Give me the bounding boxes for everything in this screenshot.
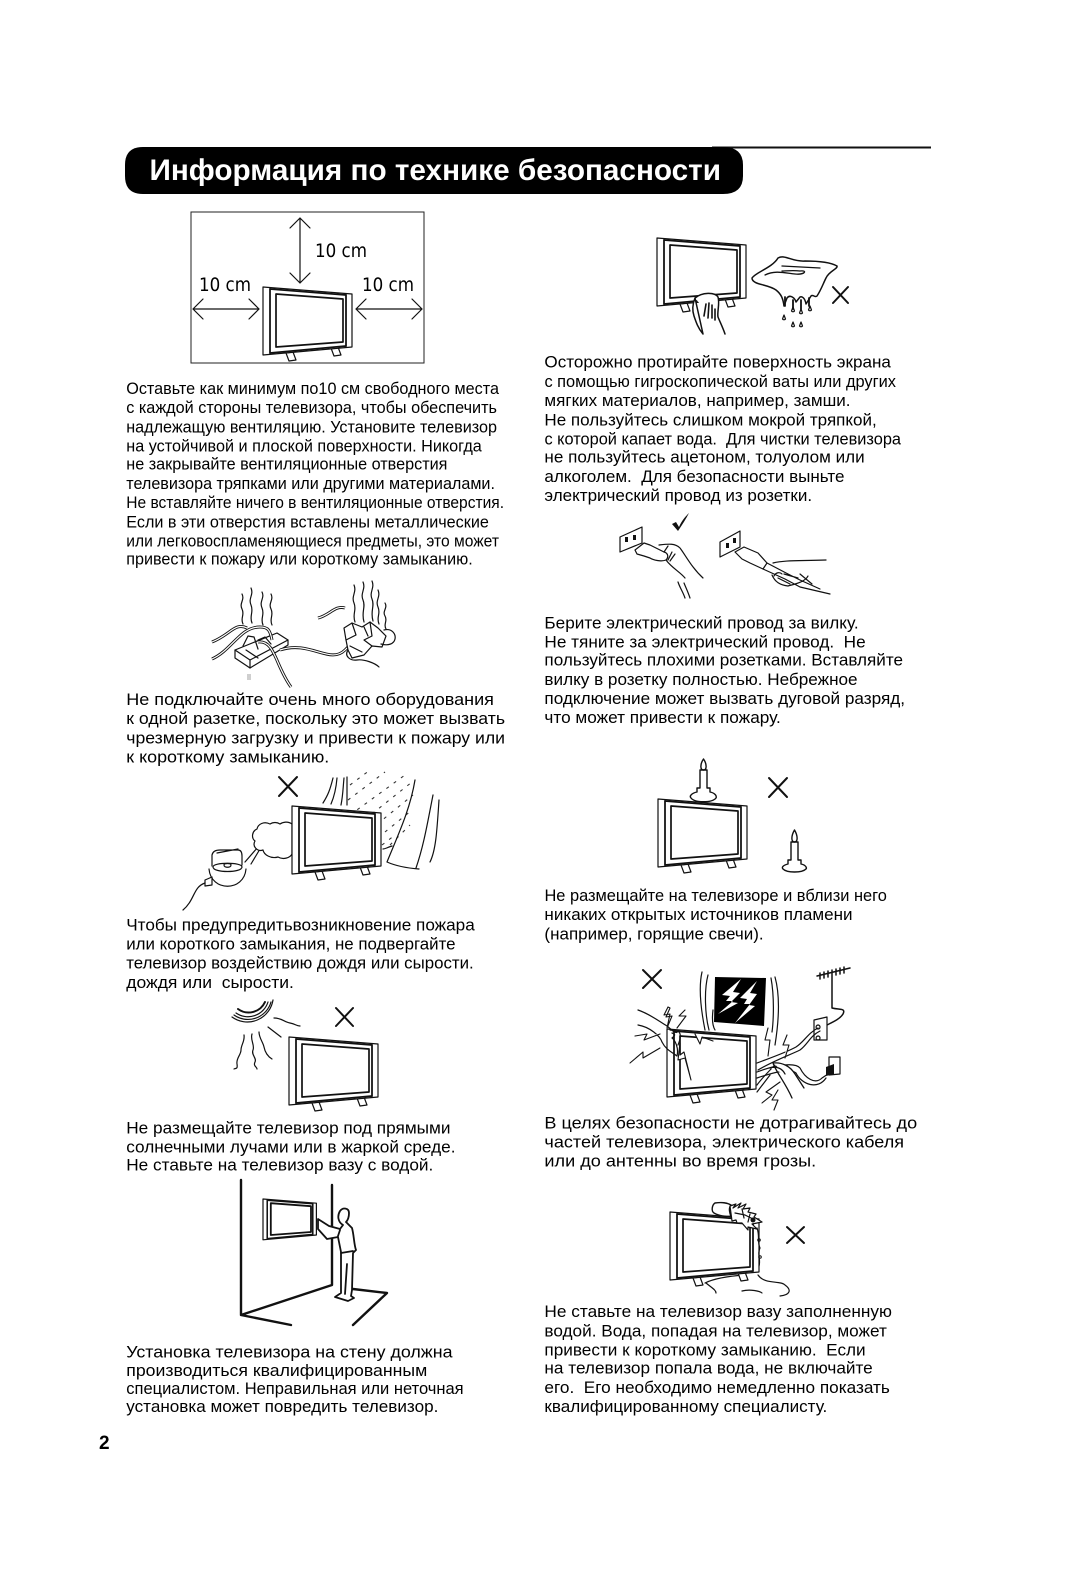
text: ventilation: Оставьте как минимум по10 см свободного места — [126, 379, 500, 398]
text: rain and moisture: дождя или сырости. — [126, 973, 294, 992]
icon: X mark sun — [336, 1008, 353, 1026]
text: ventilation: или легковоспламеняющиеся предметы, это может — [126, 531, 499, 550]
illustration: TV during a thunderstorm — [630, 967, 850, 1110]
title banner — [125, 147, 931, 194]
text: open flames: (например, горящие свечи). — [544, 924, 764, 943]
text: cleaning the screen — [544, 353, 902, 505]
text: open flames: Не размещайте на телевизоре и вблизи него — [544, 886, 887, 905]
text: ventilation: телевизора тряпками или другими материалами. — [126, 474, 495, 493]
text: thunderstorm warning — [544, 1113, 917, 1171]
page number: 2 — [99, 1433, 110, 1454]
text: rain and moisture — [126, 915, 476, 992]
illustration: overloaded power strips — [212, 581, 395, 687]
text: cleaning the screen: с помощью гигроскопической ваты или других — [544, 372, 897, 391]
icon: X mark storm — [643, 970, 661, 988]
illustration: standalone candle — [782, 830, 806, 872]
icon: X mark vase — [787, 1227, 804, 1243]
text: vase warning: квалифицированному специалисту. — [544, 1397, 827, 1416]
text: direct sunlight — [126, 1118, 456, 1175]
text: wall mounting: Установка телевизора на стену должна — [126, 1343, 453, 1362]
text: rain and moisture: Чтобы предупредитьвозникновение пожара — [126, 915, 476, 934]
text: ventilation: Не вставляйте ничего в вентиляционные отверстия. — [126, 493, 504, 512]
text: vase warning: привести к короткому замыканию. Если — [544, 1341, 866, 1360]
diagram: 10 cm clearance around TV: 10 cm — [362, 274, 414, 296]
text: thunderstorm warning: частей телевизора, электрического кабеля — [544, 1132, 904, 1151]
text: vase warning: на телевизор попала вода, не включайте — [544, 1359, 873, 1378]
text: cleaning the screen: алкоголем. Для безопасности выньте — [544, 467, 844, 486]
diagram: 10 cm clearance around TV: 10 cm — [199, 274, 251, 296]
text: ventilation: с каждой стороны телевизора, чтобы обеспечить — [126, 398, 497, 417]
text: ventilation: привести к пожару или короткому замыканию. — [126, 550, 473, 569]
illustration: wall mounting by a person — [241, 1180, 387, 1325]
text: vase warning — [544, 1302, 892, 1416]
icon: X mark kettle — [279, 777, 297, 796]
text: cleaning the screen: электрический провод из розетки. — [544, 486, 812, 505]
illustration: sun above TV — [232, 1000, 378, 1111]
diagram: 10 cm clearance around TV: 10 cm — [315, 240, 367, 262]
text: handling the plug: что может привести к пожару. — [544, 708, 781, 727]
text: wall mounting: специалистом. Неправильная или неточная — [126, 1379, 464, 1398]
text: cleaning the screen: Не пользуйтесь слишком мокрой тряпкой, — [544, 410, 877, 429]
text: vase warning: водой. Вода, попадая на телевизор, может — [544, 1321, 887, 1340]
text: overloaded sockets: к короткому замыканию. — [126, 748, 329, 767]
text: cleaning the screen: не пользуйтесь ацетоном, толуолом или — [544, 448, 865, 467]
text: handling the plug: вилку в розетку полностью. Небрежное — [544, 670, 858, 689]
text: wall mounting: производиться квалифицированным — [126, 1361, 427, 1380]
text: overloaded sockets: к одной разетке, поскольку это может вызвать — [126, 709, 505, 728]
illustration: candle on TV — [658, 759, 747, 873]
illustration: TV with kettle steam and rain — [183, 770, 439, 910]
text: vase warning: Не ставьте на телевизор вазу заполненную — [544, 1302, 892, 1321]
text: rain and moisture: телевизор воздействию дождя или сырости. — [126, 954, 474, 973]
illustration: wrong way pulling cord — [720, 531, 830, 594]
text: thunderstorm warning: В целях безопасности не дотрагивайтесь до — [544, 1113, 917, 1132]
illustration: correct way to hold plug — [620, 527, 703, 598]
text: ventilation — [126, 379, 504, 569]
text: ventilation: на устойчивой и плоской поверхности. Никогда — [126, 437, 483, 456]
text: direct sunlight: солнечными лучами или в жаркой среде. — [126, 1138, 456, 1157]
text: open flames: никаких открытых источников пламени — [544, 905, 853, 924]
icon: X mark candles — [769, 778, 787, 797]
text: handling the plug: Не тяните за электрический провод. Не — [544, 632, 866, 651]
icon: check mark — [672, 513, 689, 531]
text: handling the plug: подключение может вызвать дуговой разряд, — [544, 689, 905, 708]
text: overloaded sockets: чрезмерную загрузку и привести к пожару или — [126, 728, 505, 747]
icon: X mark cloth — [833, 287, 848, 303]
text: cleaning the screen: мягких материалов, например, замши. — [544, 391, 851, 410]
text: open flames — [544, 886, 887, 943]
illustration: wiping TV screen with cloth — [657, 238, 746, 334]
illustration: vase on TV with spilled water — [670, 1203, 789, 1296]
text: wall mounting: установка может повредить телевизор. — [126, 1397, 438, 1416]
text: cleaning the screen: с которой капает вода. Для чистки телевизора — [544, 429, 902, 448]
diagram: 10 cm clearance around TV — [191, 212, 424, 363]
text: ventilation: не закрывайте вентиляционные отверстия — [126, 455, 447, 474]
text: cleaning the screen: Осторожно протирайте поверхность экрана — [544, 353, 892, 372]
text: direct sunlight: Не размещайте телевизор под прямыми — [126, 1118, 451, 1137]
text: ventilation: надлежащую вентиляцию. Установите телевизор — [126, 417, 497, 436]
text: direct sunlight: Не ставьте на телевизор вазу с водой. — [126, 1156, 433, 1175]
text: vase warning: его. Его необходимо немедленно показать — [544, 1378, 890, 1397]
text: handling the plug — [544, 613, 905, 727]
text: handling the plug: пользуйтесь плохими розетками. Вставляйте — [544, 651, 903, 670]
illustration: dripping wet cloth — [752, 257, 837, 327]
text: ventilation: Если в эти отверстия вставлены металлические — [126, 512, 489, 531]
text: wall mounting — [126, 1343, 464, 1416]
text: rain and moisture: или короткого замыкания, не подвергайте — [126, 934, 456, 953]
title banner: Информация по технике безопасности — [150, 154, 721, 187]
text: thunderstorm warning: или до антенны во время грозы. — [544, 1152, 816, 1171]
text: overloaded sockets — [126, 690, 505, 767]
text: handling the plug: Берите электрический провод за вилку. — [544, 613, 859, 632]
text: overloaded sockets: Не подключайте очень много оборудования — [126, 690, 494, 709]
